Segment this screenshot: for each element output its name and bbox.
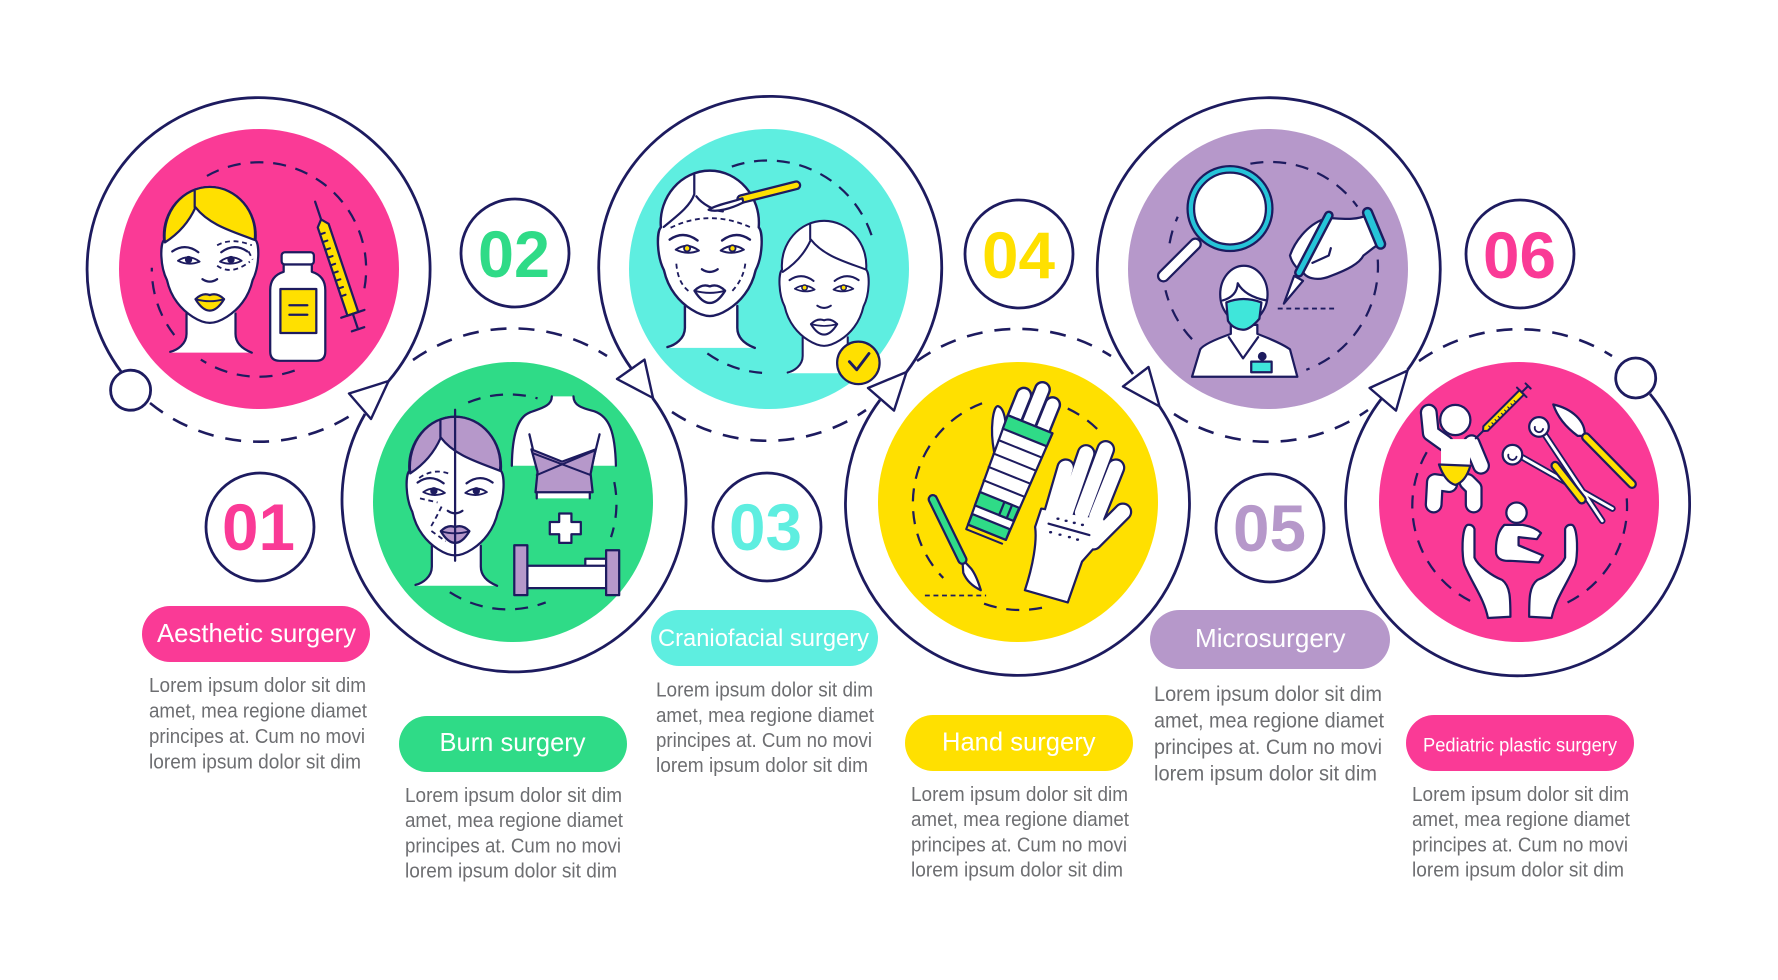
panel: aesthetic surgery circle [119, 129, 399, 409]
label: craniofacial surgery: Craniofacial surgery [658, 625, 869, 652]
arrow 1 to 2 [349, 381, 389, 419]
text block 6: amet, mea regione diamet [1412, 809, 1630, 831]
number 01: 01 [222, 490, 295, 564]
arrow 3 to 4 [868, 372, 906, 411]
number 04: 04 [982, 218, 1055, 292]
icon: face, bottle and syringe [152, 162, 370, 377]
label: burn surgery: Burn surgery [440, 727, 586, 757]
text block 2: principes at. Cum no movi [405, 836, 621, 858]
arrow 4 to 5 [1123, 367, 1160, 406]
number 04 [965, 200, 1073, 308]
icon: magnifier, surgeon and hand with scalpel [1163, 162, 1382, 377]
text block 2 [405, 785, 623, 882]
number 06: 06 [1483, 218, 1556, 292]
ring 2 [342, 328, 686, 672]
icon: babies, syringe, forceps, scalpel and caring hands [1412, 381, 1632, 618]
icon: two faces with scalpel and check badge [658, 160, 880, 384]
number 06 [1466, 200, 1574, 308]
label: burn surgery [399, 716, 627, 772]
text block 1: lorem ipsum dolor sit dim [149, 752, 361, 774]
label: hand surgery: Hand surgery [942, 726, 1096, 756]
text block 6 [1412, 784, 1630, 882]
number 02: 02 [478, 217, 550, 291]
icon: burned face, bandaged torso, cross and bed [407, 394, 619, 609]
icon: bandaged hand, open hand and scalpel [913, 376, 1123, 610]
text block 4: amet, mea regione diamet [911, 809, 1129, 831]
label: microsurgery: Microsurgery [1195, 623, 1346, 653]
text block 2: Lorem ipsum dolor sit dim [405, 785, 622, 807]
label: craniofacial surgery [651, 610, 878, 666]
ring 3 [599, 96, 942, 441]
text block 4: principes at. Cum no movi [911, 834, 1127, 856]
label: microsurgery [1150, 610, 1390, 669]
panel: microsurgery circle [1128, 129, 1408, 409]
text block 1: Lorem ipsum dolor sit dim [149, 675, 366, 697]
ring 1 with start marker [87, 98, 430, 442]
label: hand surgery [905, 715, 1133, 771]
text block 1: amet, mea regione diamet [149, 700, 367, 722]
text block 5: Lorem ipsum dolor sit dim [1154, 683, 1382, 706]
ring 6 with end marker [1346, 329, 1690, 676]
text block 4: lorem ipsum dolor sit dim [911, 860, 1123, 882]
text block 6: principes at. Cum no movi [1412, 834, 1628, 856]
number 01 [206, 473, 314, 581]
text block 5: principes at. Cum no movi [1154, 736, 1382, 759]
text block 4 [911, 784, 1129, 882]
text block 2: lorem ipsum dolor sit dim [405, 860, 617, 882]
text block 6: lorem ipsum dolor sit dim [1412, 860, 1624, 882]
text block 3: lorem ipsum dolor sit dim [656, 755, 868, 777]
text block 6: Lorem ipsum dolor sit dim [1412, 784, 1629, 806]
text block 1 [149, 675, 367, 774]
text block 3: principes at. Cum no movi [656, 730, 872, 752]
text block 3: amet, mea regione diamet [656, 705, 874, 727]
number 05: 05 [1233, 491, 1306, 565]
arrow 2 to 3 [617, 360, 653, 398]
text block 5: lorem ipsum dolor sit dim [1154, 762, 1377, 786]
text block 5 [1154, 683, 1384, 786]
label: pediatric plastic surgery: Pediatric plastic surgery [1423, 736, 1617, 756]
panel: pediatric plastic surgery circle [1379, 362, 1659, 642]
number 02 [461, 199, 569, 307]
text block 3 [656, 680, 874, 777]
number 03 [713, 473, 821, 581]
ring 5 [1097, 98, 1440, 442]
panel: hand surgery circle [878, 362, 1158, 642]
panel: craniofacial surgery circle [629, 129, 909, 409]
ring 4 [845, 329, 1189, 675]
number 05 [1216, 474, 1324, 582]
label: aesthetic surgery: Aesthetic surgery [157, 618, 356, 648]
number 03: 03 [729, 490, 802, 564]
arrow 5 to 6 [1370, 371, 1408, 411]
text block 4: Lorem ipsum dolor sit dim [911, 784, 1128, 806]
text block 1: principes at. Cum no movi [149, 726, 365, 748]
text block 5: amet, mea regione diamet [1154, 710, 1384, 732]
text block 2: amet, mea regione diamet [405, 810, 623, 832]
label: pediatric plastic surgery [1406, 715, 1634, 771]
label: aesthetic surgery [142, 606, 370, 662]
panel: burn surgery circle [373, 362, 653, 642]
text block 3: Lorem ipsum dolor sit dim [656, 680, 873, 702]
